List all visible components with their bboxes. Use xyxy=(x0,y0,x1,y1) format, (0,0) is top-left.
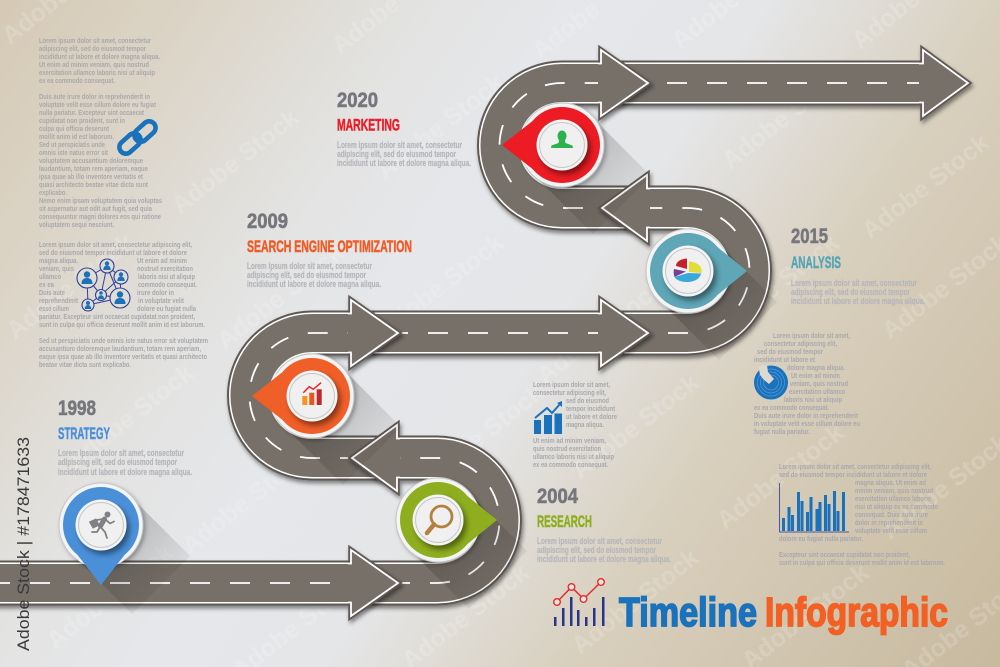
road: final segment with arrow xyxy=(605,50,968,116)
heading: 2004 research: RESEARCH xyxy=(537,512,592,531)
text block: center: tempor incididunt xyxy=(566,406,616,413)
watermark: Adobe Stock xyxy=(61,359,199,475)
watermark: Adobe Stock xyxy=(176,444,314,560)
watermark: Adobe Stock xyxy=(716,59,854,175)
watermark: Adobe Stock xyxy=(41,539,179,655)
text block: center: ex ea commodo consequat. xyxy=(533,462,608,469)
text block: top left: Duis aute irure dolor in reprehenderit in xyxy=(39,94,150,101)
text block: top left: voluptatem sequi nesciunt. xyxy=(39,222,114,229)
heading: 1998 strategy: Lorem ipsum dolor sit amet, consectetur xyxy=(58,448,184,458)
text block: center: Ut enim ad minim veniam, xyxy=(533,438,606,445)
text block: center: ut labore et dolore xyxy=(566,414,617,421)
text block: right middle: ex ea commodo consequat. xyxy=(754,405,829,412)
text block: bottom right xyxy=(779,464,945,567)
text block: right middle xyxy=(754,333,860,436)
text block: right middle: Duis aute irure dolor in reprehenderit xyxy=(754,413,859,420)
heading: 2015 analysis: incididunt ut labore et dolore magna aliqua. xyxy=(791,296,925,306)
text block: right middle: sed do eiusmod tempor xyxy=(757,349,823,356)
text block: top left: exercitation ullamco laboris nisi ut aliquip xyxy=(39,70,155,77)
heading: 2015 analysis: 2015 xyxy=(791,225,828,248)
text block: right middle: dolore magna aliqua. xyxy=(787,365,845,372)
icon: radial chart xyxy=(754,365,788,400)
text block: bottom right: minim veniam, quis nostrud xyxy=(855,488,933,495)
heading: 2009 search engine optimization: adipiscing elit, sed do eiusmod tempor xyxy=(247,270,366,280)
text block: left middle: eaque ipsa quae ab illo inventore veritatis et quasi architecto xyxy=(39,354,207,361)
text block: left middle: veniam, quis xyxy=(39,266,74,273)
text block: center: ullamco laboris nisi ut aliquip xyxy=(533,454,614,461)
text block: top left: mollit anim id est laborum. xyxy=(39,134,114,141)
text block: top left: explicabo. xyxy=(39,190,67,197)
text block: top left: cupidatat non proident, sunt in xyxy=(39,118,125,125)
text block: left middle xyxy=(39,242,208,369)
text block: top left: voluptatem accusantium doloremque xyxy=(39,158,143,165)
watermark: Adobe Stock xyxy=(166,104,304,220)
text block: left middle: in voluptate velit xyxy=(138,298,185,305)
road: upper curve to top arrow xyxy=(500,50,648,208)
text block: top left: adipiscing elit, sed do eiusmod tempor xyxy=(39,46,146,53)
heading: 1998 strategy: STRATEGY xyxy=(58,424,110,443)
text block: bottom right: Lorem ipsum dolor sit amet, consectetur adipiscing elit, xyxy=(779,464,931,471)
text block: center xyxy=(533,382,617,469)
watermark: Adobe Stock xyxy=(411,379,549,495)
text block: left middle: Duis aute xyxy=(39,290,65,297)
text block: top left: omnis iste natus error sit xyxy=(39,150,109,157)
stock id label: Adobe Stock | #178471633 xyxy=(14,437,33,651)
icon: person xyxy=(551,130,573,148)
road: long middle segment with arrow xyxy=(358,300,648,366)
text block: top left: Nemo enim ipsam voluptatem quia voluptas xyxy=(39,198,162,205)
watermark: Adobe Stock xyxy=(856,129,994,245)
text block: right middle: exercitation ullamco xyxy=(789,389,845,396)
text block: bottom right: dolor in reprehenderit in xyxy=(855,520,923,527)
watermark: Adobe Stock xyxy=(706,229,844,345)
text block: center: quis nostrud exercitation xyxy=(533,446,601,453)
watermark: Adobe Stock xyxy=(371,69,509,185)
icon: chain link xyxy=(117,119,158,156)
text block: center: Lorem ipsum dolor sit amet, xyxy=(533,382,610,389)
title: Timeline xyxy=(619,589,757,635)
pin: 2015 analysis xyxy=(646,229,777,360)
icon: title line chart xyxy=(554,579,604,626)
text block: left middle: irure dolor in xyxy=(137,290,174,297)
heading: 2009 search engine optimization: SEARCH ENGINE OPTIMIZATION xyxy=(247,237,412,256)
icon: people network xyxy=(77,259,130,311)
pin: 2020 marketing xyxy=(502,103,651,234)
heading: 2015 analysis: adipiscing elit, sed do eiusmod tempor xyxy=(791,287,910,297)
heading: 1998 strategy: adipiscing elit, sed do eiusmod tempor xyxy=(58,457,177,467)
text block: bottom right: exercitation ullamco laboris xyxy=(855,496,931,503)
heading: 2004 research: incididunt ut labore et dolore magna aliqua. xyxy=(537,554,671,564)
heading: 2015 analysis xyxy=(791,225,925,306)
text block: left middle: beatae vitae dicta sunt explicabo. xyxy=(39,362,131,369)
pin: 2009 search engine optimization xyxy=(252,354,401,485)
text block: top left: Lorem ipsum dolor sit amet, consectetur xyxy=(39,38,151,45)
text block: right middle: incididunt ut labore et xyxy=(754,357,816,364)
road: left curve to middle arrow xyxy=(250,300,398,458)
text block: top left: ex ea commodo consequat. xyxy=(39,78,115,85)
title: Infographic xyxy=(765,589,948,635)
heading: 2004 research xyxy=(537,485,671,564)
pin: 1998 strategy xyxy=(59,483,190,614)
text block: top left: voluptate velit esse cillum dolore eu fugiat xyxy=(39,102,157,109)
text block: bottom right: Excepteur sint occaecat cupidatat non proident, xyxy=(779,552,910,559)
text block: left middle: Lorem ipsum dolor sit amet, consectetur adipiscing elit, xyxy=(39,242,192,249)
text block: bottom right: sunt in culpa qui officia deserunt mollit anim id est laborum. xyxy=(779,560,945,567)
text block: left middle: Ut enim ad minim xyxy=(137,258,187,265)
title xyxy=(619,589,948,635)
text block: top left xyxy=(39,38,162,229)
watermark: Adobe Stock xyxy=(531,274,669,390)
watermark: Adobe Stock xyxy=(371,229,509,345)
heading: 2004 research: adipiscing elit, sed do eiusmod tempor xyxy=(537,545,656,555)
text block: left middle: Sed ut perspiciatis unde omnis iste natus error sit voluptatem xyxy=(39,338,208,345)
heading: 2009 search engine optimization: incididunt ut labore et dolore magna aliqua. xyxy=(247,279,381,289)
heading: 2020 marketing: MARKETING xyxy=(337,116,400,134)
text block: bottom right: magna aliqua. Ut enim ad xyxy=(855,480,926,487)
text block: left middle: sed do eiusmod tempor incididunt ut labore et dolore xyxy=(39,250,187,257)
text block: left middle: dolore eu fugiat nulla xyxy=(137,306,196,313)
text block: top left: ipsa quae ab illo inventore veritatis et xyxy=(39,174,144,181)
watermark: Adobe Stock xyxy=(1,229,139,345)
text block: left middle: sunt in culpa qui officia deserunt mollit anim id est laborum. xyxy=(39,322,205,329)
text block: top left: laudantium, totam rem aperiam, eaque xyxy=(39,166,148,173)
text block: left middle: accusantium doloremque laudantium, totam rem aperiam, xyxy=(39,346,201,353)
text block: right middle: laboris nisi ut aliquip xyxy=(784,397,842,404)
heading: 2004 research: 2004 xyxy=(537,485,578,508)
text block: left middle: magna aliqua. xyxy=(39,258,78,265)
watermark: Adobe Stock xyxy=(566,544,704,660)
text block: top left: culpa qui officia deserunt xyxy=(39,126,110,133)
heading: 2020 marketing xyxy=(337,89,471,168)
text block: bottom right: consequat. Duis aute irure xyxy=(855,512,928,519)
text block: right middle: consectetur adipiscing elit, xyxy=(764,341,837,348)
watermark: Adobe Stock xyxy=(211,239,349,355)
heading: 2004 research: Lorem ipsum dolor sit amet, consectetur xyxy=(537,536,662,546)
icon: pie chart xyxy=(674,258,702,282)
text block: top left: Sed ut perspiciatis unde xyxy=(39,142,105,149)
watermark: Adobe Stock xyxy=(566,369,704,485)
icon: growth bars xyxy=(534,401,562,434)
text block: left middle: reprehenderit xyxy=(39,298,79,305)
heading: 1998 strategy: incididunt ut labore et dolore magna aliqua. xyxy=(58,467,192,477)
icon: running man xyxy=(90,512,114,538)
text block: right middle: in voluptate velit esse cillum dolore eu xyxy=(754,421,860,428)
pin: 2004 research xyxy=(396,478,527,609)
text block: top left: incididunt ut labore et dolore magna aliqua. xyxy=(39,54,160,61)
heading: 2015 analysis: Lorem ipsum dolor sit amet, consectetur xyxy=(791,278,917,288)
text block: top left: sit aspernatur aut odit aut fugit, sed quia xyxy=(39,206,152,213)
text block: top left: quasi architecto beatae vitae dicta sunt xyxy=(39,182,149,189)
text block: right middle: Lorem ipsum dolor sit amet, xyxy=(773,333,850,340)
heading: 2020 marketing: Lorem ipsum dolor sit amet, consectetur xyxy=(337,140,462,150)
watermark: Adobe Stock xyxy=(711,419,849,535)
text block: left middle: pariatur. Excepteur sint occaecat cupidatat non proident, xyxy=(39,314,195,321)
text block: left middle: nostrud exercitation xyxy=(137,266,193,273)
text block: bottom right: dolore eu fugiat nulla pariatur. xyxy=(779,536,863,543)
text block: left middle: ex ea xyxy=(39,282,54,289)
heading: 2020 marketing: adipiscing elit, sed do eiusmod tempor xyxy=(337,149,456,159)
heading: 1998 strategy xyxy=(58,397,192,477)
text block: left middle: esse cillum xyxy=(39,306,69,313)
heading: 2009 search engine optimization: 2009 xyxy=(247,210,288,233)
text block: right middle: veniam, quis nostrud xyxy=(790,381,848,388)
heading: 1998 strategy: 1998 xyxy=(58,397,96,420)
text block: bottom right: voluptate velit esse cillum xyxy=(855,528,927,535)
text block: top left: nulla pariatur. Excepteur sint occaecat xyxy=(39,110,145,117)
text block: left middle: ullamco xyxy=(39,274,61,281)
text block: center: sed do eiusmod xyxy=(566,398,609,405)
text block: center: magna aliqua. xyxy=(566,422,604,429)
heading: 2015 analysis: ANALYSIS xyxy=(791,253,841,272)
road: start segment with arrow xyxy=(0,550,398,616)
text block: bottom right: nisi ut aliquip ex ea commodo xyxy=(855,504,938,511)
text block: top left: consequuntur magni dolores eos qui ratione xyxy=(39,214,161,221)
text block: left middle: laboris nisi ut aliquip xyxy=(138,274,195,281)
bar chart xyxy=(780,483,849,532)
text block: bottom right: sed do eiusmod tempor incididunt ut labore et dolore xyxy=(779,472,927,479)
text block: top left: Ut enim ad minim veniam, quis nostrud xyxy=(39,62,149,69)
heading: 2009 search engine optimization xyxy=(247,210,412,289)
text block: right middle: Ut enim ad minim xyxy=(791,373,840,380)
road: lower curve with left arrow xyxy=(352,425,499,583)
heading: 2009 search engine optimization: Lorem ipsum dolor sit amet, consectetur xyxy=(247,261,372,271)
heading: 2020 marketing: incididunt ut labore et dolore magna aliqua. xyxy=(337,158,471,168)
heading: 2020 marketing: 2020 xyxy=(337,89,378,112)
road: right curve with left arrow xyxy=(602,175,750,333)
icon: magnifier xyxy=(427,506,452,533)
icon: rising bars xyxy=(302,383,322,405)
text block: right middle: fugiat nulla pariatur. xyxy=(754,429,810,436)
text block: center: consectetur adipiscing elit, xyxy=(533,390,606,397)
text block: left middle: commodo consequat. xyxy=(138,282,197,289)
